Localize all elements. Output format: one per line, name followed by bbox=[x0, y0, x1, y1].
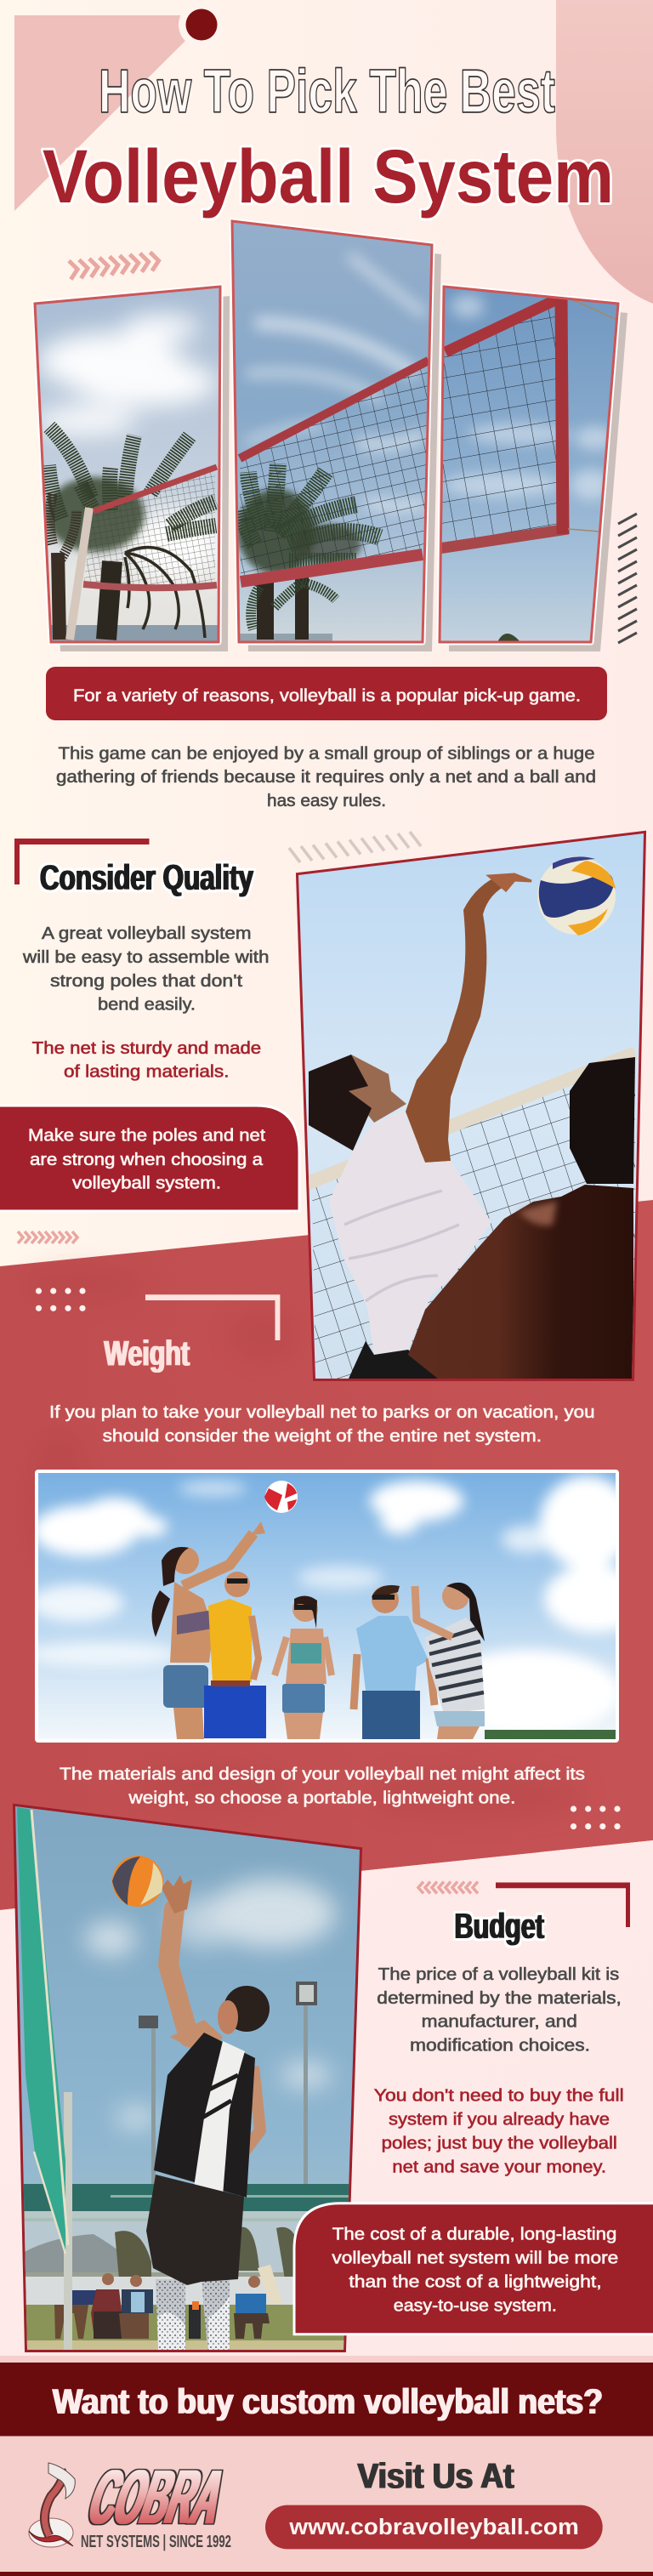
text block: should consider the weight of the entire net system. bbox=[103, 1427, 542, 1446]
weight closing text bbox=[60, 1765, 585, 1808]
chevrons bbox=[418, 1881, 478, 1893]
woman left bbox=[152, 1521, 265, 1739]
man blue bbox=[354, 1585, 434, 1739]
intro paragraph: has easy rules. bbox=[267, 792, 386, 810]
dots bbox=[36, 1288, 86, 1311]
woman striped bbox=[415, 1583, 485, 1739]
tank top bbox=[154, 2033, 255, 2198]
red text bbox=[32, 1039, 261, 1082]
tree line bbox=[485, 1730, 616, 1739]
title bbox=[43, 58, 614, 219]
ball bbox=[112, 1856, 163, 1907]
text block: will be easy to assemble with bbox=[22, 948, 269, 967]
logo bbox=[29, 2454, 236, 2551]
chevrons top bbox=[69, 252, 160, 279]
lower pale background bbox=[0, 1840, 653, 2356]
panel middle: sky and net bbox=[231, 219, 434, 643]
section: weight bbox=[36, 1288, 595, 1446]
green net bbox=[17, 1807, 65, 2251]
second player bbox=[408, 1185, 633, 1382]
bracket bbox=[14, 839, 150, 884]
arm bbox=[168, 1909, 189, 2037]
intro paragraph bbox=[56, 744, 596, 810]
shorts bbox=[146, 2175, 244, 2285]
photo: spike at net bbox=[298, 832, 646, 1382]
text block: A great volleyball system bbox=[42, 924, 252, 943]
red text: The net is sturdy and made bbox=[32, 1039, 261, 1058]
text block: determined by the materials, bbox=[377, 1989, 622, 2008]
ball bbox=[537, 856, 616, 935]
callout: The cost of a durable, long-lasting bbox=[332, 2226, 616, 2244]
red text: net and save your money. bbox=[392, 2158, 606, 2177]
decorative triangle top left bbox=[14, 15, 189, 211]
text block: The price of a volleyball kit is bbox=[378, 1965, 619, 1984]
red text: system if you already have bbox=[389, 2111, 610, 2130]
text block bbox=[22, 924, 269, 1014]
red text: of lasting materials. bbox=[64, 1063, 230, 1082]
text block: bend easily. bbox=[98, 995, 196, 1014]
decorative shape top right bbox=[556, 0, 653, 304]
post bbox=[64, 2092, 72, 2351]
url pill: www.cobravolleyball.com bbox=[288, 2516, 579, 2539]
ball bbox=[264, 1481, 298, 1513]
head bbox=[349, 1055, 406, 1123]
green fence and ground bbox=[21, 2184, 357, 2211]
heading: Consider Quality bbox=[40, 857, 253, 897]
logo wordmark: COBRA bbox=[80, 2454, 236, 2539]
net bbox=[312, 1055, 635, 1379]
weight closing text: The materials and design of your volleyball net might affect its bbox=[60, 1765, 585, 1783]
weight closing text: weight, so choose a portable, lightweight one. bbox=[128, 1789, 515, 1808]
text block bbox=[377, 1965, 622, 2056]
callout: than the cost of a lightweight, bbox=[349, 2272, 602, 2291]
callout: Make sure the poles and net bbox=[28, 1127, 265, 1146]
head bbox=[224, 1986, 270, 2032]
url pill bbox=[265, 2505, 603, 2549]
stripes above spike photo bbox=[289, 832, 421, 862]
photo panels: net bbox=[34, 219, 627, 651]
red text: poles; just buy the volleyball bbox=[382, 2134, 617, 2152]
callout: volleyball system. bbox=[72, 1174, 221, 1192]
photo: friends with ball bbox=[26, 1470, 646, 1743]
text block: If you plan to take your volleyball net to parks or on vacation, you bbox=[49, 1403, 595, 1422]
arm bbox=[406, 874, 508, 1163]
heading: Budget bbox=[454, 1906, 544, 1946]
callout: easy-to-use system. bbox=[394, 2297, 557, 2316]
visit us bbox=[265, 2455, 603, 2549]
clouds bbox=[26, 1476, 646, 1735]
call to action band bbox=[0, 2363, 653, 2436]
legs bbox=[156, 2279, 230, 2350]
man yellow bbox=[204, 1572, 266, 1738]
red band background bbox=[0, 1200, 653, 1910]
bracket bbox=[496, 1883, 630, 1927]
panel right: net corner bbox=[438, 285, 621, 644]
callout: are strong when choosing a bbox=[30, 1151, 264, 1169]
text block bbox=[49, 1403, 595, 1446]
ghost silhouettes in band bbox=[26, 1267, 587, 1820]
clouds bbox=[85, 1879, 336, 2128]
callout bbox=[294, 2204, 653, 2334]
photo: player hitting ball bbox=[13, 1803, 363, 2356]
panel left: palms and net bbox=[34, 286, 221, 643]
section: budget bbox=[294, 1881, 653, 2334]
text block: modification choices. bbox=[410, 2037, 590, 2056]
text block: strong poles that don't bbox=[50, 972, 243, 991]
heading: Weight bbox=[104, 1333, 190, 1373]
intro bar bbox=[46, 667, 607, 720]
text block: manufacturer, and bbox=[422, 2012, 577, 2031]
section: consider quality bbox=[0, 839, 299, 1243]
call to action band: Want to buy custom volleyball nets? bbox=[53, 2381, 603, 2421]
chevrons bbox=[18, 1231, 77, 1243]
shorts bbox=[349, 1341, 442, 1379]
player bbox=[146, 1875, 270, 2350]
icon: cobra bbox=[29, 2463, 75, 2547]
intro paragraph: This game can be enjoyed by a small group of siblings or a huge bbox=[58, 744, 595, 763]
woman middle bbox=[275, 1595, 332, 1739]
decorative circle bbox=[179, 2, 224, 48]
light poles bbox=[139, 1982, 317, 2184]
spectators bbox=[54, 2273, 270, 2339]
palm mass bbox=[237, 489, 315, 574]
stripes right of photos bbox=[618, 514, 637, 643]
footer background bbox=[0, 2356, 653, 2576]
red text bbox=[374, 2087, 624, 2177]
intro paragraph: gathering of friends because it requires only a net and a ball and bbox=[56, 768, 596, 787]
bracket bbox=[145, 1294, 280, 1340]
red text: You don't need to buy the full bbox=[374, 2087, 624, 2106]
bottom strip bbox=[0, 2572, 653, 2576]
dots right bbox=[571, 1805, 621, 1829]
callout bbox=[0, 1106, 299, 1211]
panel shadows bbox=[44, 230, 627, 651]
palm mass bbox=[46, 477, 145, 552]
callout: volleyball net system will be more bbox=[332, 2249, 618, 2268]
shirt bbox=[329, 1110, 491, 1355]
intro bar: For a variety of reasons, volleyball is a popular pick-up game. bbox=[73, 687, 581, 706]
heading: Visit Us At bbox=[357, 2455, 514, 2495]
logo tagline: NET SYSTEMS | SINCE 1992 bbox=[81, 2533, 231, 2551]
